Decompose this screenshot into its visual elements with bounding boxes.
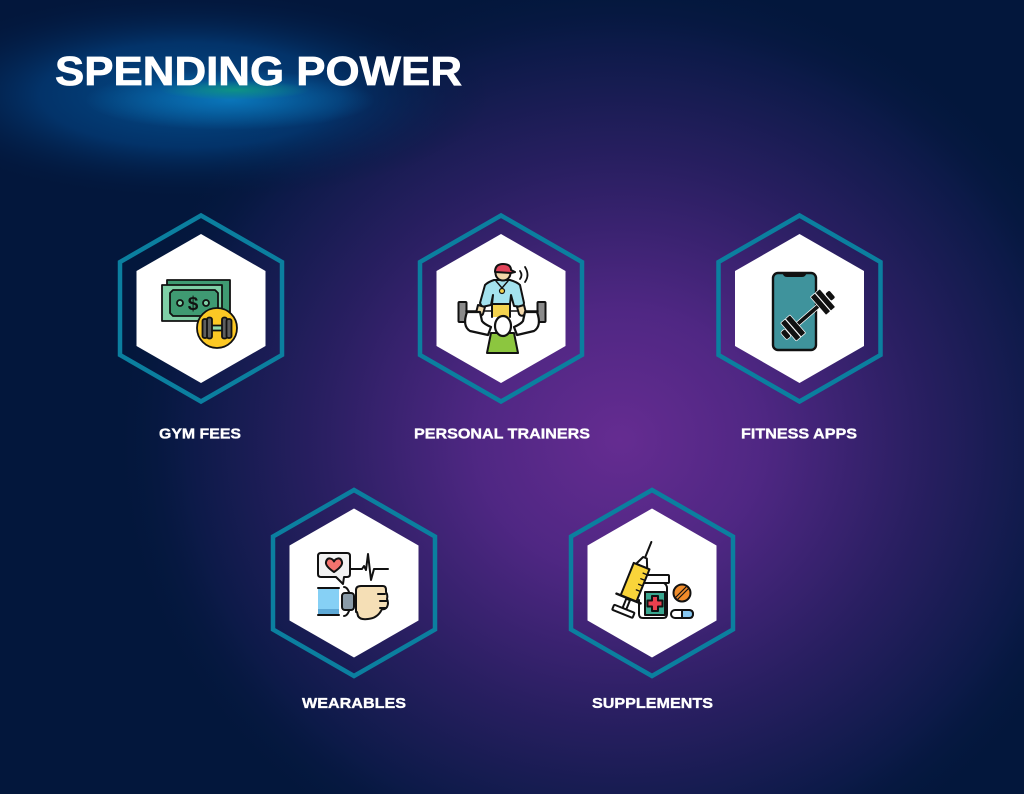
- label: personal trainers: PERSONAL TRAINERS: [414, 426, 590, 442]
- title: SPENDING POWER: [55, 48, 462, 94]
- icon: money and dumbbell: $: [188, 294, 199, 315]
- panel: personal trainers: [414, 216, 590, 442]
- panel: supplements: [571, 490, 733, 712]
- panel: fitness apps: [718, 216, 880, 442]
- hexagon frame: personal trainers: [420, 216, 582, 402]
- panel: wearables: [273, 490, 435, 712]
- hexagon frame: wearables: [273, 490, 435, 676]
- icon: syringe, jar and pills: [610, 537, 693, 619]
- hexagon frame: supplements: [571, 490, 733, 676]
- hexagon frame: fitness apps: [718, 216, 880, 402]
- label: gym fees: GYM FEES: [159, 426, 241, 442]
- label: supplements: SUPPLEMENTS: [592, 695, 713, 712]
- label: wearables: WEARABLES: [302, 695, 406, 712]
- label: fitness apps: FITNESS APPS: [741, 426, 857, 442]
- icon: smartwatch with heart rate: [318, 553, 388, 619]
- panel: gym fees: [120, 216, 282, 442]
- icon: phone with dumbbell: [773, 273, 840, 350]
- hexagon frame: gym fees: [120, 216, 282, 402]
- icon: trainer spotting lifter: [458, 264, 546, 353]
- icon: money and dumbbell: [162, 280, 237, 348]
